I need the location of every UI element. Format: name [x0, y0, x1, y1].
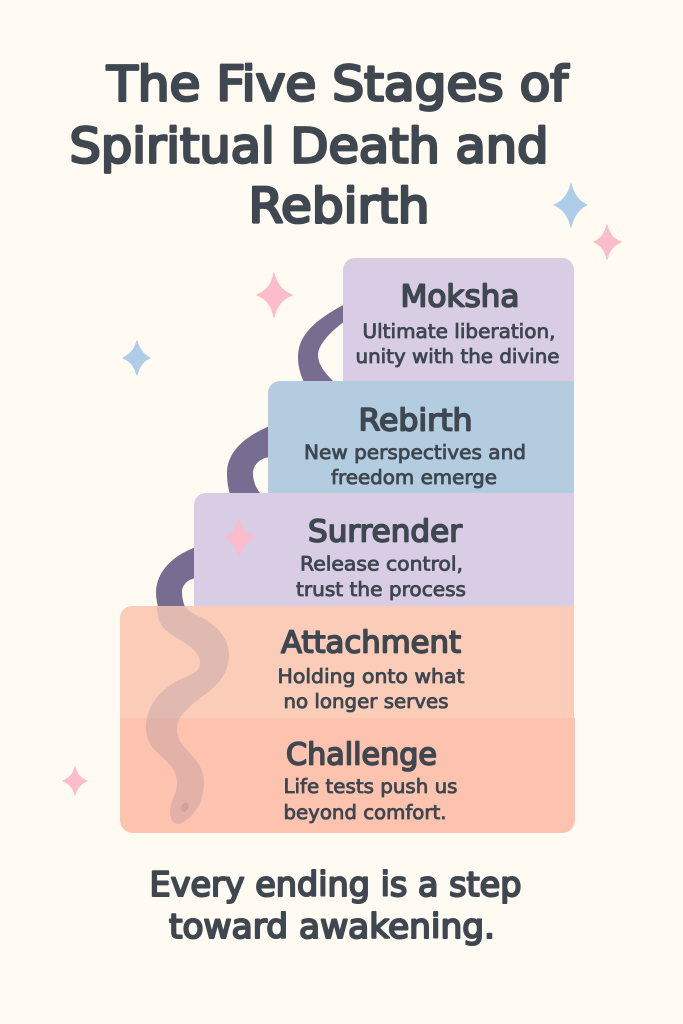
panel: Moksha: [343, 258, 574, 382]
icon: sparkle pink left of Moksha: [257, 273, 292, 317]
panel: Moksha: unity with the divine: [356, 345, 560, 368]
panel: Attachment: [120, 606, 574, 718]
title: Spiritual Death and: [70, 118, 548, 174]
panel: Attachment: Attachment: [281, 626, 461, 660]
panel: Surrender: Release control,: [300, 552, 463, 576]
title: [70, 56, 569, 234]
panel: Surrender: [194, 493, 574, 606]
panel: Moksha: Ultimate liberation,: [362, 320, 556, 343]
closing message: Every ending is a step: [150, 865, 522, 904]
panel: Rebirth: Rebirth: [358, 404, 472, 438]
panel: Rebirth: New perspectives and: [304, 441, 526, 464]
panel: Moksha: Moksha: [400, 280, 520, 314]
icon: sparkle blue top right: [554, 184, 587, 227]
panel: Challenge: Life tests push us: [284, 775, 458, 798]
title: Rebirth: [248, 178, 430, 234]
icon: sparkle pink top right: [594, 225, 621, 259]
icon: snake eye: [180, 801, 190, 813]
snake body behind the steps: [156, 304, 345, 607]
panel: Rebirth: freedom emerge: [331, 466, 497, 489]
title: The Five Stages of: [106, 56, 569, 112]
icon: translucent snake: [146, 606, 229, 824]
panel: Surrender: trust the process: [296, 578, 466, 601]
icon: sparkle pink bottom left: [63, 767, 87, 795]
panel: Rebirth: [268, 381, 574, 494]
closing message: [150, 865, 522, 946]
panel: Challenge: [120, 718, 575, 833]
panel: Challenge: Challenge: [286, 738, 437, 772]
icon: sparkle blue left: [123, 341, 150, 375]
closing message: toward awakening.: [169, 907, 495, 946]
panel: Attachment: Holding onto what: [278, 665, 465, 688]
panel: Surrender: Surrender: [308, 514, 462, 550]
panel: Challenge: beyond comfort.: [284, 801, 446, 824]
panel: Attachment: no longer serves: [284, 690, 448, 713]
icon: sparkle pink on Surrender: [226, 519, 255, 557]
